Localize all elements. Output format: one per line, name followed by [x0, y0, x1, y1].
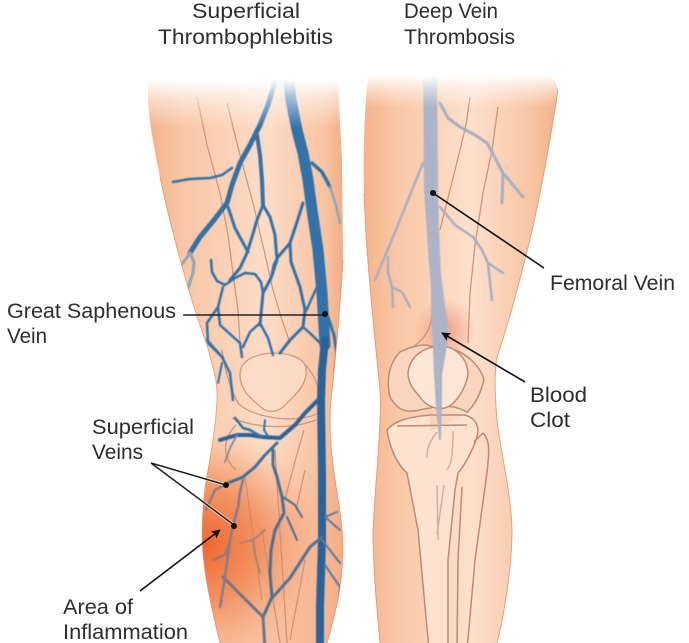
panel: left leg with superficial veins: [140, 60, 350, 643]
femoral vein and branches: [375, 60, 523, 440]
label: Superficial Veins: [92, 416, 237, 529]
title: Superficial Thrombophlebitis: Superficial: [192, 0, 300, 23]
panel: right leg with deep vein: [355, 60, 565, 643]
label: Blood Clot: Clot: [530, 409, 570, 432]
title: Deep Vein Thrombosis: Deep Vein: [404, 0, 498, 23]
title: Deep Vein Thrombosis: [404, 0, 515, 49]
right leg nerves: [414, 97, 499, 346]
label: Blood Clot: [442, 333, 587, 432]
label: Femoral Vein: [430, 190, 675, 295]
label: Blood Clot: Blood: [530, 384, 587, 407]
label: Great Saphenous Vein: Great Saphenous: [7, 300, 176, 323]
label: Area of Inflammation: Area of: [63, 596, 133, 619]
title: Deep Vein Thrombosis: Thrombosis: [404, 26, 515, 49]
left leg nerves and bones: [197, 97, 320, 643]
label: Superficial Veins: Veins: [92, 441, 143, 464]
label: Femoral Vein: Femoral Vein: [550, 272, 675, 295]
title: Superficial Thrombophlebitis: Thrombophlebitis: [158, 26, 333, 49]
label: Area of Inflammation: [63, 530, 220, 643]
label: Great Saphenous Vein: Vein: [7, 325, 47, 348]
knee and lower leg bones: [387, 345, 489, 643]
superficial vein network: [173, 62, 340, 643]
great saphenous vein: [287, 62, 325, 345]
label: Superficial Veins: Superficial: [92, 416, 194, 439]
kneecap outline: [240, 353, 306, 411]
label: Great Saphenous Vein: [7, 300, 328, 348]
title: Superficial Thrombophlebitis: [158, 0, 333, 49]
